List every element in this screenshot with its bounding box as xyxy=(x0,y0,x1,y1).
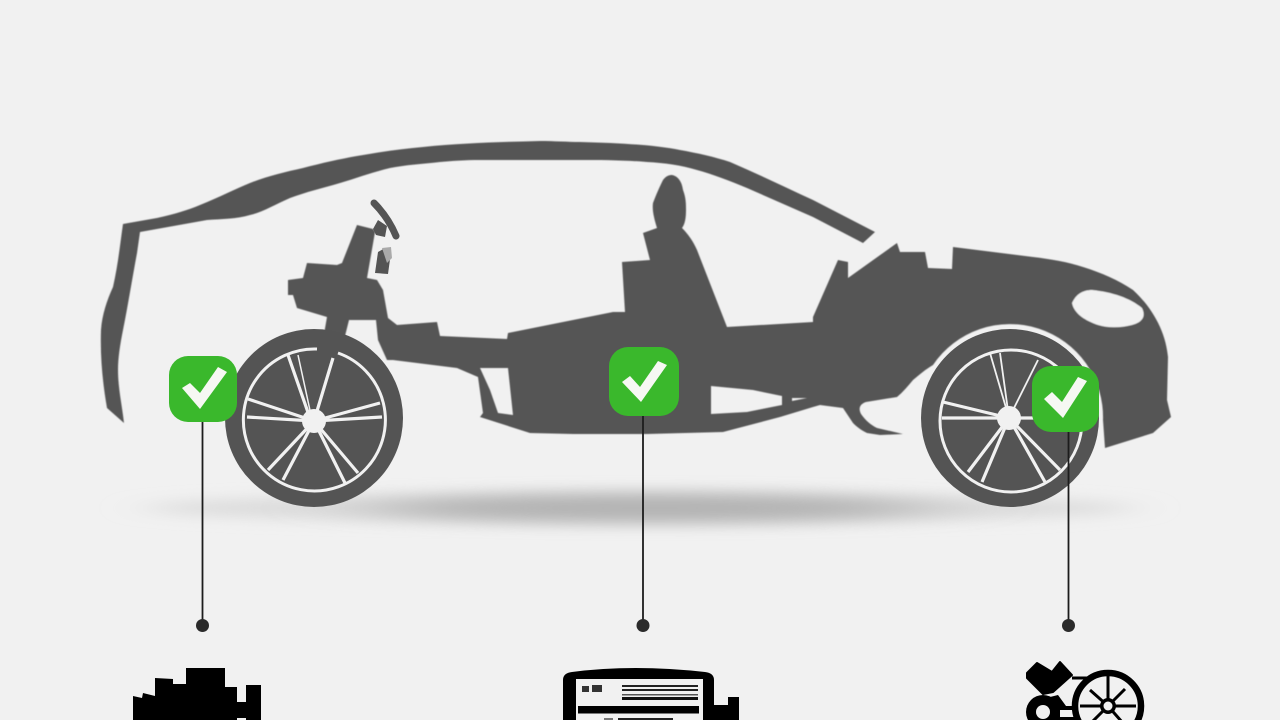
steering wheel and column xyxy=(373,203,396,274)
front wheel xyxy=(225,329,403,507)
connector line: middle xyxy=(636,414,650,632)
car chassis, seat and bonnet silhouette xyxy=(288,175,1171,448)
headlight xyxy=(1072,290,1144,327)
connector line: right xyxy=(1062,430,1075,632)
check badge: middle xyxy=(609,347,679,416)
rear wheel xyxy=(921,329,1099,507)
ground shadow xyxy=(145,493,1135,523)
connector line: left xyxy=(196,420,209,632)
check badge: left xyxy=(169,356,237,422)
icon: control unit screen xyxy=(563,668,739,720)
car roof and rear outline xyxy=(101,141,875,423)
check badge: right xyxy=(1032,366,1099,432)
icon: drivetrain gear and wheel xyxy=(1026,662,1141,720)
icon: engine block xyxy=(133,668,261,720)
